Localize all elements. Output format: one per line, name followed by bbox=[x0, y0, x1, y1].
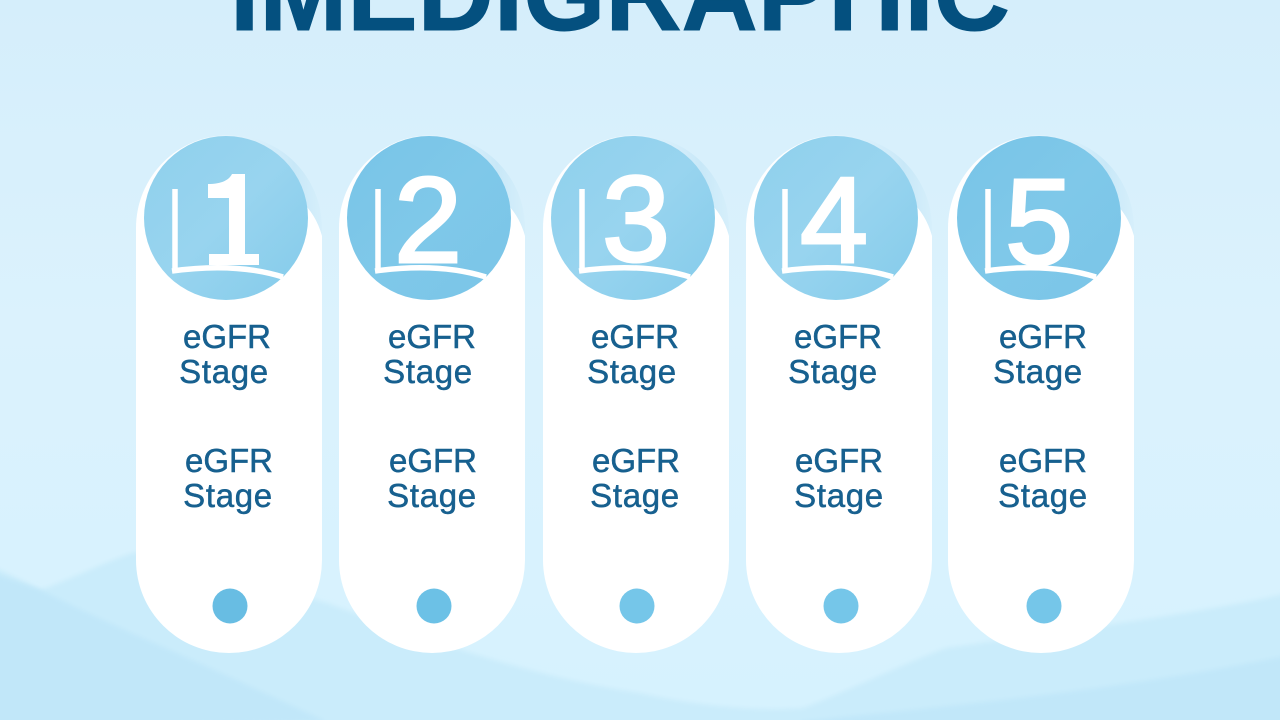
icon: number badge 5: 5 bbox=[1005, 154, 1073, 290]
label: eGFR Stage upper: eGFR bbox=[183, 318, 271, 355]
icon: number badge 2 bbox=[347, 136, 511, 300]
label: eGFR Stage upper: Stage bbox=[383, 353, 473, 390]
label: eGFR Stage lower: eGFR bbox=[795, 442, 883, 479]
icon: number badge 3 bbox=[551, 136, 715, 300]
label: eGFR Stage upper: eGFR bbox=[388, 318, 476, 355]
label: eGFR Stage lower: eGFR bbox=[999, 442, 1087, 479]
icon: number badge 4: 4 bbox=[800, 152, 868, 288]
dot bbox=[824, 588, 858, 624]
icon: number badge 3: 3 bbox=[602, 151, 670, 287]
label: eGFR Stage upper: Stage bbox=[179, 353, 269, 390]
icon: number badge 5 bbox=[957, 136, 1121, 300]
label: eGFR Stage lower: eGFR bbox=[389, 442, 477, 479]
dot bbox=[416, 588, 452, 624]
panel: stage 2 bbox=[339, 135, 525, 653]
label: eGFR Stage lower: eGFR bbox=[185, 442, 273, 479]
label: eGFR Stage lower: Stage bbox=[590, 477, 680, 514]
icon: number badge 4 bbox=[754, 136, 918, 300]
panel: stage 3 bbox=[543, 135, 729, 653]
icon: number badge 2: 2 bbox=[394, 152, 462, 288]
dot bbox=[212, 588, 248, 624]
label: eGFR Stage upper: eGFR bbox=[591, 318, 679, 355]
dot bbox=[1026, 588, 1062, 624]
label: eGFR Stage lower: Stage bbox=[183, 477, 273, 514]
label: eGFR Stage upper: Stage bbox=[788, 353, 878, 390]
label: eGFR Stage lower: eGFR bbox=[592, 442, 680, 479]
label: eGFR Stage upper: eGFR bbox=[794, 318, 882, 355]
label: eGFR Stage upper: eGFR bbox=[999, 318, 1087, 355]
label: eGFR Stage upper: Stage bbox=[993, 353, 1083, 390]
panel: stage 4 bbox=[746, 135, 932, 653]
label: eGFR Stage lower: Stage bbox=[387, 477, 477, 514]
label: eGFR Stage upper: Stage bbox=[587, 353, 677, 390]
dot bbox=[620, 588, 654, 624]
icon: number badge 1 bbox=[144, 136, 308, 300]
panel: stage 5 bbox=[948, 135, 1134, 653]
label: eGFR Stage lower: Stage bbox=[794, 477, 884, 514]
label: eGFR Stage lower: Stage bbox=[998, 477, 1088, 514]
panel: stage 1 bbox=[136, 135, 322, 653]
